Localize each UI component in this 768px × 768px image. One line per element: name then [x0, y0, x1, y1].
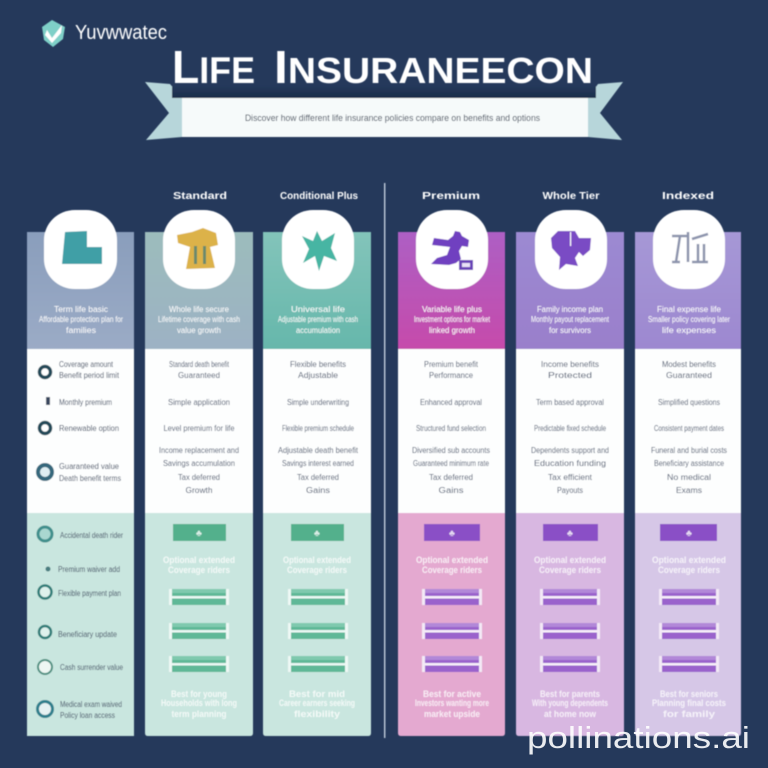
feature list: Benefit period limit	[59, 371, 120, 380]
white row text: Performance	[429, 371, 474, 380]
column headings: Indexed	[662, 191, 714, 202]
feature list	[38, 360, 121, 483]
white row text: Simple underwriting	[287, 398, 349, 407]
white row text: Diversified sub accounts	[412, 446, 490, 455]
header text: Universal life	[291, 305, 346, 314]
watermark: pollinations.ai	[527, 720, 750, 755]
feature list: Guaranteed value	[59, 462, 120, 471]
white row text: Gains	[438, 486, 464, 495]
bottom ratings: Best for young	[171, 689, 227, 699]
white row text: Predictable fixed schedule	[534, 424, 606, 433]
icon badge: grey columns	[653, 210, 725, 289]
bottom ratings: Coverage riders	[168, 565, 230, 575]
center divider	[384, 183, 385, 738]
white row text: Flexible premium schedule	[282, 424, 354, 433]
bottom list	[38, 527, 123, 720]
header text: Final expense life	[657, 305, 722, 314]
white row text: Tax deferred	[178, 473, 220, 482]
white row text: Structured fund selection	[416, 424, 486, 433]
icon badge: teal star	[282, 210, 354, 289]
panel: column 4	[398, 210, 505, 736]
white row text: Payouts	[557, 486, 583, 495]
bottom ratings	[161, 524, 237, 719]
white row text: Standard death benefit	[169, 360, 230, 369]
white row text: Term based approval	[536, 398, 604, 407]
bottom list: Cash surrender value	[60, 663, 123, 672]
header text: Whole life secure	[169, 305, 230, 314]
panel: column 2	[145, 210, 253, 736]
bottom ratings: Households with long	[161, 698, 237, 708]
white row text: Savings interest earned	[282, 459, 354, 468]
bottom ratings	[652, 524, 726, 719]
bottom ratings: ♣	[196, 528, 202, 538]
header text	[39, 305, 123, 335]
ribbon subtitle: Discover how different life insurance policies compare on benefits and options	[245, 113, 540, 123]
panel: column 6	[635, 210, 741, 736]
white row text: Guaranteed	[178, 371, 220, 380]
bottom ratings: market upside	[424, 709, 480, 719]
bottom list: Flexible payment plan	[58, 589, 121, 598]
white row text: Income benefits	[541, 360, 599, 369]
white row text: Adjustable	[298, 371, 339, 380]
bottom ratings: Investors wanting more	[415, 698, 489, 708]
white row text	[651, 360, 727, 495]
white row text: Income replacement and	[159, 446, 239, 455]
title: LIFE	[172, 41, 255, 93]
icon badge: gold house	[163, 210, 235, 289]
feature list: Renewable option	[59, 424, 119, 433]
bottom ratings: ♣	[314, 528, 320, 538]
white row text: Premium benefit	[424, 360, 479, 369]
white row text: Funeral and burial costs	[651, 446, 727, 455]
header text	[531, 305, 610, 335]
bottom ratings: Optional extended	[534, 555, 606, 565]
bottom ratings: Best for parents	[540, 689, 600, 699]
white row text: Modest benefits	[662, 360, 716, 369]
header text: Variable life plus	[422, 305, 482, 314]
white row text: Protected	[548, 371, 592, 380]
bottom ratings: Best for seniors	[660, 689, 718, 699]
bottom ratings: Coverage riders	[287, 565, 347, 575]
column headings: Standard	[173, 191, 227, 202]
bottom list: Policy loan access	[60, 711, 115, 720]
header text: Lifetime coverage with cash	[158, 315, 240, 324]
header text: life expenses	[662, 326, 716, 335]
white row text: Level premium for life	[164, 424, 235, 433]
white row text: Adjustable death benefit	[278, 446, 359, 455]
bottom ratings: term planning	[172, 709, 226, 719]
column headings: Premium	[422, 191, 480, 202]
header text: Family income plan	[537, 305, 603, 314]
panel: column 1 features	[27, 210, 134, 736]
white row text: Exams	[676, 486, 702, 495]
white row text: Tax deferred	[429, 473, 473, 482]
bottom ratings: Coverage riders	[539, 565, 601, 575]
bottom list: Accidental death rider	[60, 531, 123, 540]
white row text	[412, 360, 490, 495]
white row text: Growth	[186, 486, 212, 495]
white row text: No medical	[667, 473, 711, 482]
white row text: Education funding	[534, 459, 606, 468]
bottom ratings: With young dependents	[532, 698, 608, 708]
icon badge: purple scales	[416, 210, 488, 289]
feature list: Monthly premium	[59, 398, 112, 407]
bottom list: Beneficiary update	[58, 630, 117, 639]
bottom ratings: Optional extended	[652, 555, 726, 565]
white row text: Enhanced approval	[420, 398, 482, 407]
bottom ratings: flexibility	[294, 709, 340, 719]
header text	[648, 305, 730, 335]
bottom ratings	[279, 524, 355, 719]
white row text: Beneficiary assistance	[654, 459, 724, 468]
bottom ratings: Best for mid	[289, 689, 345, 699]
white row text: Savings accumulation	[163, 459, 235, 468]
header text: linked growth	[429, 326, 475, 335]
bottom ratings: Optional extended	[163, 555, 235, 565]
white row text	[159, 360, 239, 495]
bottom ratings: ♣	[449, 528, 455, 538]
bottom ratings: at home now	[544, 709, 597, 719]
bottom ratings: Optional extended	[283, 555, 351, 565]
logo: Yuvwwatec	[75, 22, 167, 44]
feature list: Death benefit terms	[59, 474, 121, 483]
header text: families	[66, 326, 96, 335]
white row text: Gains	[306, 486, 330, 495]
feature list: Coverage amount	[59, 360, 114, 369]
title: INSURANEECON	[274, 41, 593, 93]
bottom ratings: for family	[663, 709, 715, 719]
bottom list: Medical exam waived	[60, 700, 122, 709]
header text: accumulation	[296, 326, 340, 335]
header text: Adjustable premium with cash	[278, 315, 358, 324]
header text: Investment options for market	[414, 315, 491, 324]
white row text: Tax efficient	[548, 473, 593, 482]
header text	[158, 305, 240, 335]
icon badge: purple head	[535, 210, 607, 289]
bottom ratings: ♣	[686, 528, 692, 538]
white row text	[278, 360, 359, 495]
white row text: Simplified questions	[658, 398, 720, 407]
header text: for survivors	[549, 326, 591, 335]
white row text: Tax deferred	[297, 473, 339, 482]
icon badge: teal block	[44, 210, 117, 289]
header text: Smaller policy covering later	[648, 315, 730, 324]
bottom ratings: ♣	[567, 528, 573, 538]
header text: Monthly payout replacement	[531, 315, 610, 324]
bottom ratings: Coverage riders	[422, 565, 482, 575]
white row text: Guaranteed minimum rate	[413, 459, 489, 468]
bottom ratings: Planning final costs	[652, 698, 726, 708]
header text: Affordable protection plan for	[39, 315, 123, 324]
white row text: Consistent payment dates	[654, 424, 724, 433]
white row text: Flexible benefits	[290, 360, 346, 369]
white row text	[531, 360, 609, 495]
column headings: Conditional Plus	[280, 191, 358, 202]
bottom ratings: Coverage riders	[658, 565, 720, 575]
ribbon banner	[145, 82, 623, 140]
panel: column 5	[516, 210, 624, 736]
bottom ratings: Career earners seeking	[279, 698, 355, 708]
white row text: Simple application	[168, 398, 230, 407]
column headings	[173, 191, 714, 202]
column headings: Whole Tier	[542, 191, 600, 202]
white row text: Dependents support and	[531, 446, 609, 455]
header text: value growth	[177, 326, 221, 335]
header text	[414, 305, 491, 335]
bottom list: Premium waiver add	[58, 565, 120, 574]
white row text: Guaranteed	[666, 371, 712, 380]
bottom ratings: Optional extended	[416, 555, 488, 565]
bottom ratings	[532, 524, 608, 719]
bottom ratings: Best for active	[423, 689, 481, 699]
header text: Term life basic	[54, 305, 108, 314]
panel: column 3	[263, 210, 371, 736]
header text	[278, 305, 358, 335]
logo	[42, 20, 167, 47]
bottom ratings	[415, 524, 489, 719]
